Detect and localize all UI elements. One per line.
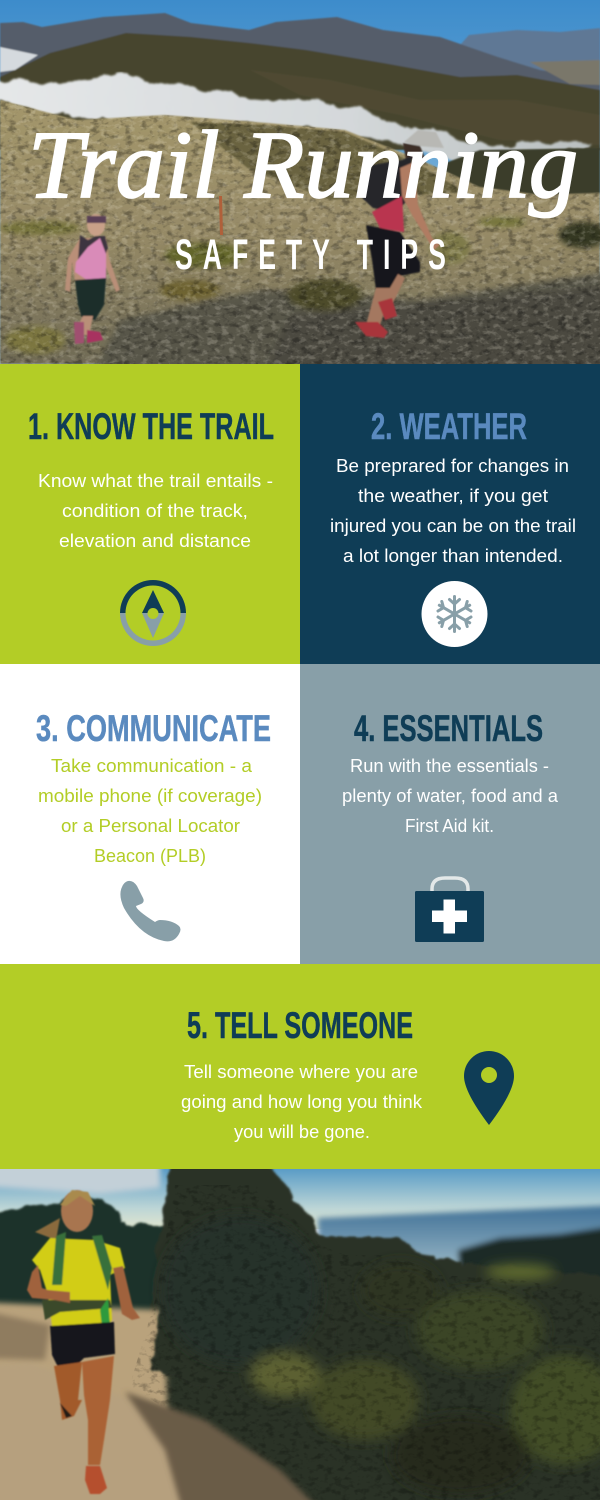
runner bbox=[27, 1190, 140, 1494]
subtitle: Safety Tips: SAFETY TIPS bbox=[175, 231, 446, 279]
text block 1: condition of the track, bbox=[62, 500, 248, 521]
hero photo: runners on a mountain ridge bbox=[0, 0, 600, 380]
text block 1: Know what the trail entails - bbox=[38, 470, 273, 491]
text block 4: plenty of water, food and a bbox=[342, 785, 559, 806]
bottom photo: runner on coastal trail bbox=[0, 1160, 600, 1500]
runner 2 bbox=[355, 130, 444, 338]
heading 2: 2. WEATHER bbox=[371, 406, 527, 447]
icon: snowflake bbox=[422, 581, 488, 647]
text block 5: you will be gone. bbox=[234, 1121, 370, 1142]
heading 3: 3. COMMUNICATE bbox=[36, 708, 271, 749]
panel: communicate bbox=[0, 664, 300, 964]
text block 2: the weather, if you get bbox=[358, 485, 548, 506]
text block 4: First Aid kit. bbox=[405, 815, 494, 836]
text block 2: injured you can be on the trail bbox=[330, 515, 576, 536]
text block 5: Tell someone where you are bbox=[184, 1061, 418, 1082]
icon: location pin bbox=[464, 1051, 514, 1125]
text block 5: going and how long you think bbox=[181, 1091, 423, 1112]
text block 3: Beacon (PLB) bbox=[94, 845, 206, 866]
text block 3: mobile phone (if coverage) bbox=[38, 785, 262, 806]
text block 3: Take communication - a bbox=[51, 755, 253, 776]
text block 1: elevation and distance bbox=[59, 530, 251, 551]
runner 1 bbox=[65, 214, 120, 344]
text block 3: or a Personal Locator bbox=[61, 815, 240, 836]
text block 2: Be preprared for changes in bbox=[336, 455, 569, 476]
icon: first aid kit bbox=[415, 878, 484, 942]
panel: tell someone bbox=[0, 964, 600, 1169]
panel: know the trail bbox=[0, 364, 300, 664]
icon: phone bbox=[120, 881, 180, 941]
panel: essentials bbox=[300, 664, 600, 964]
text block 4: Run with the essentials - bbox=[350, 755, 549, 776]
heading 5: 5. TELL SOMEONE bbox=[187, 1005, 413, 1046]
text block 2: a lot longer than intended. bbox=[343, 545, 563, 566]
icon: compass bbox=[120, 580, 186, 646]
panel: weather bbox=[300, 364, 600, 664]
title: Trail Running: Trail Running bbox=[28, 111, 578, 218]
heading 1: 1. KNOW THE TRAIL bbox=[28, 406, 274, 447]
